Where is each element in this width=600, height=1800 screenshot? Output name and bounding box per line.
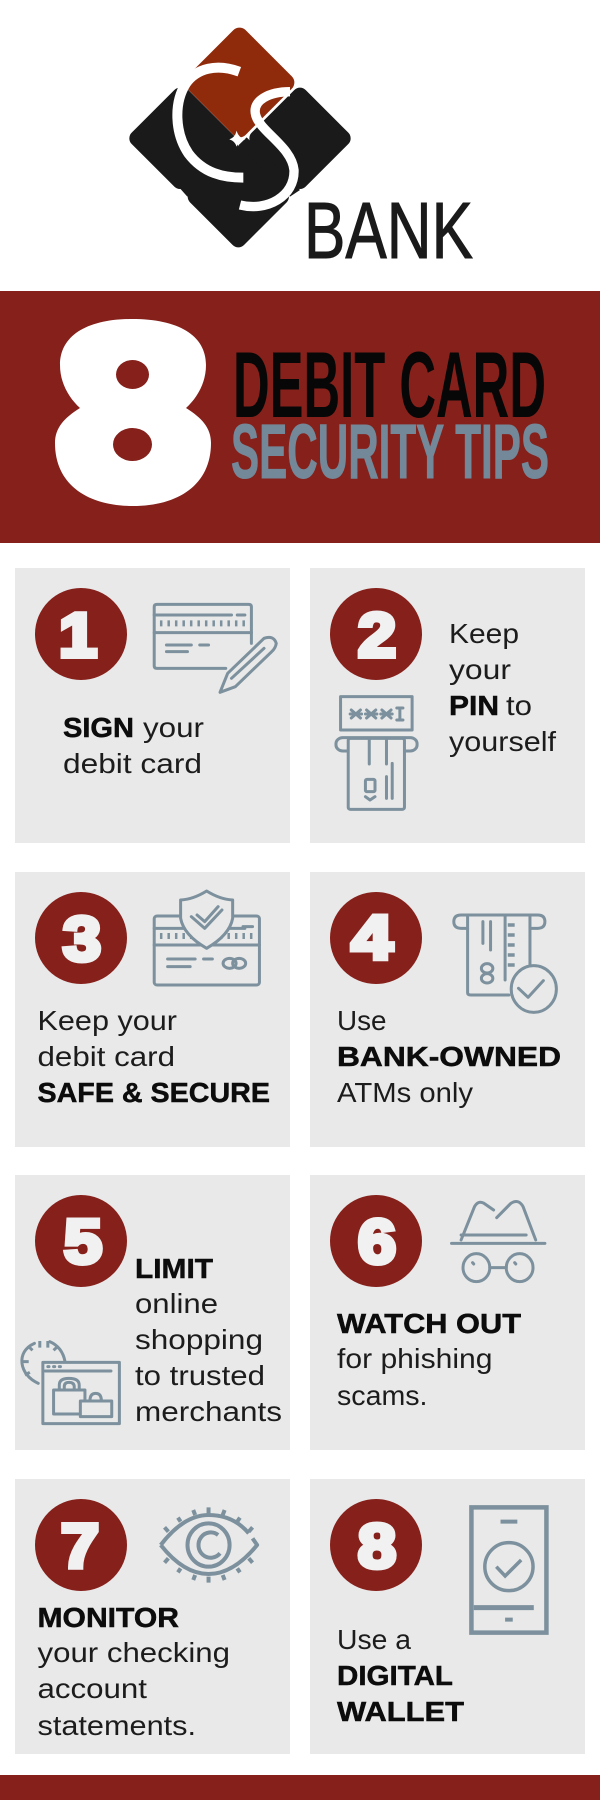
panel background: [15, 1479, 290, 1754]
panel background: [310, 872, 585, 1147]
number badge 2: 2: [358, 602, 396, 670]
panel background: [15, 568, 290, 843]
tip text: DIGITAL: [337, 1660, 453, 1691]
panel background: [310, 1479, 585, 1754]
tip text: account: [38, 1673, 147, 1704]
tip text: SIGN: [63, 712, 134, 743]
number badge 3: [35, 892, 127, 984]
number badge 4: 4: [352, 904, 393, 972]
tip text: to trusted: [135, 1360, 265, 1391]
icon: shopping browser: [22, 1341, 119, 1424]
tip text: your checking: [38, 1637, 230, 1668]
tip text: [449, 618, 556, 757]
number badge 6: [330, 1195, 422, 1287]
tip text: [135, 1253, 282, 1427]
number badge 1: [35, 588, 127, 680]
number badge 5: [35, 1195, 127, 1287]
logo word BANK: BANK: [304, 186, 473, 275]
footer band: [0, 1775, 600, 1800]
panel background: [310, 1175, 585, 1450]
panel background: [15, 1175, 290, 1450]
tip text: SAFE & SECURE: [38, 1077, 270, 1108]
panel: tip 5: [15, 1175, 290, 1450]
tip text: merchants: [135, 1396, 282, 1427]
tip text: [63, 712, 204, 779]
number badge 2: [330, 588, 422, 680]
tip text: BANK-OWNED: [337, 1041, 561, 1072]
panel background: [310, 568, 585, 843]
big number 8: 8: [62, 291, 203, 537]
panel: tip 6: [310, 1175, 585, 1450]
number badge 4: [330, 892, 422, 984]
tip text: MONITOR: [38, 1602, 179, 1633]
tip text: debit card: [63, 748, 202, 779]
number badge 5: 5: [64, 1208, 102, 1277]
panel: tip 2: [310, 568, 585, 843]
tip text: debit card: [38, 1041, 175, 1072]
icon: hat and glasses: [452, 1201, 545, 1282]
panel: tip 7: [15, 1479, 290, 1754]
tip text: LIMIT: [135, 1253, 213, 1284]
icon: card and shield: [154, 891, 259, 985]
number badge 6: 6: [358, 1208, 396, 1277]
logo mark: [126, 24, 354, 251]
icon: eye: [161, 1507, 257, 1583]
number badge 8: [330, 1499, 422, 1591]
tip text: for phishing: [337, 1343, 492, 1374]
tip text: shopping: [135, 1324, 263, 1355]
tip text: [38, 1602, 230, 1741]
panel: tip 4: [310, 872, 585, 1147]
tip text: WATCH OUT: [337, 1308, 521, 1339]
tip text: PIN: [449, 690, 499, 721]
number badge 7: [35, 1499, 127, 1591]
tip text: scams.: [337, 1380, 428, 1411]
icon: ATM slot with check: [454, 915, 556, 1012]
tip text: online: [135, 1288, 218, 1319]
icon: card and pencil: [154, 604, 276, 692]
number badge 8: 8: [358, 1512, 396, 1582]
panel: tip 1: [15, 568, 290, 843]
number badge 3: 3: [63, 906, 101, 974]
tip text: your: [449, 654, 511, 685]
panel background: [15, 872, 290, 1147]
tip text: [337, 1308, 521, 1411]
icon: phone with check: [471, 1507, 546, 1633]
tip text: Use: [337, 1005, 386, 1036]
tip text: your: [143, 712, 204, 743]
panel: tip 3: [15, 872, 290, 1147]
tip text: [337, 1005, 561, 1108]
tip text: Use a: [337, 1624, 411, 1655]
icon: PIN and card slot: [336, 697, 417, 809]
tip text: yourself: [449, 726, 556, 757]
number badge 7: 7: [61, 1512, 99, 1582]
tip text: to: [506, 690, 532, 721]
tip text: Keep: [449, 618, 519, 649]
tip text: WALLET: [337, 1696, 464, 1727]
banner background: [0, 291, 600, 543]
tip text: statements.: [38, 1710, 196, 1741]
number badge 1: 1: [59, 602, 97, 670]
logo: CS Bank: [126, 24, 473, 275]
tip text: Keep your: [38, 1005, 177, 1036]
tip text: [38, 1005, 270, 1108]
panel: tip 8: [310, 1479, 585, 1754]
tip text: [337, 1624, 464, 1727]
tip text: ATMs only: [337, 1077, 473, 1108]
title banner: [0, 291, 600, 543]
